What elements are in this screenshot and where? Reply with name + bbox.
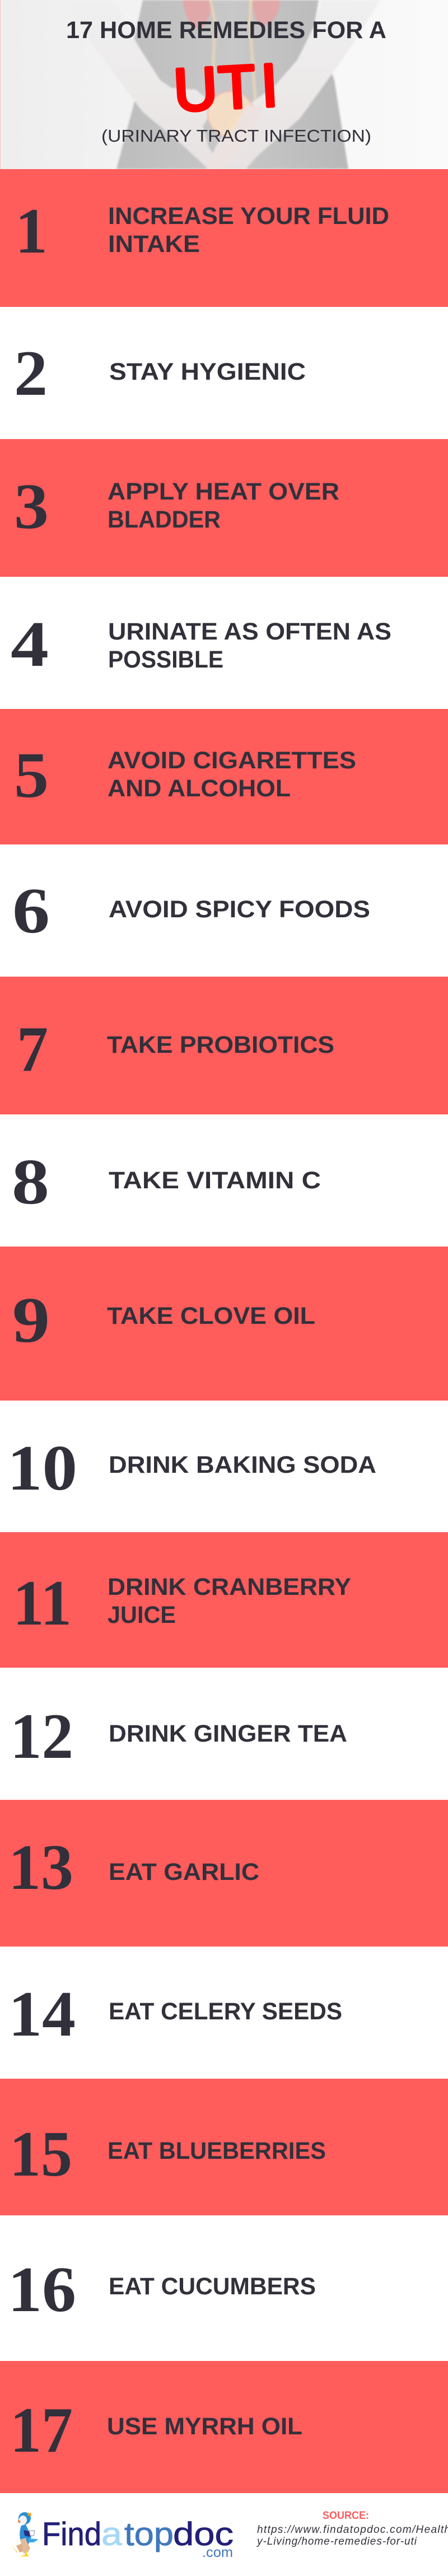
wordmark: Find	[42, 2516, 101, 2552]
remedy 13 panel: EAT GARLIC	[109, 1859, 259, 1886]
remedy 2 panel: 2	[14, 338, 48, 409]
wordmark: a	[101, 2516, 123, 2552]
remedy 1 panel: INTAKE	[108, 231, 200, 258]
remedy 4 panel	[0, 577, 448, 709]
remedy 3 panel	[0, 439, 448, 577]
remedy 12 panel: DRINK GINGER TEA	[109, 1720, 347, 1747]
remedy 3 panel: APPLY HEAT OVER	[108, 478, 339, 505]
remedy 11 panel: DRINK CRANBERRY	[108, 1574, 351, 1600]
remedy 16 panel: 16	[8, 2254, 76, 2326]
remedy 7 panel: TAKE PROBIOTICS	[107, 1032, 334, 1058]
remedy 17 panel: USE MYRRH OIL	[107, 2413, 302, 2440]
title line: 17 HOME REMEDIES FOR A	[66, 17, 386, 44]
remedy 2 panel	[0, 307, 448, 439]
source url: https://www.findatopdoc.com/Health	[257, 2524, 448, 2536]
footer logo	[11, 2512, 234, 2560]
remedy 1 panel: INCREASE YOUR FLUID	[108, 203, 389, 230]
remedy 4 panel: 4	[11, 609, 49, 680]
remedy 5 panel: 5	[14, 740, 49, 811]
remedy 12 panel	[0, 1668, 448, 1800]
remedy 9 panel: 9	[12, 1285, 50, 1356]
remedy 17 panel	[0, 2361, 448, 2493]
icon: mascot bird	[11, 2512, 38, 2556]
source block	[256, 2510, 448, 2547]
remedy 16 panel: EAT CUCUMBERS	[109, 2273, 316, 2300]
remedy 3 panel: BLADDER	[108, 506, 221, 533]
remedy 11 panel	[0, 1532, 448, 1668]
remedy 6 panel: AVOID SPICY FOODS	[109, 896, 370, 923]
remedy 6 panel: 6	[12, 875, 50, 947]
remedy 14 panel: 14	[8, 1978, 76, 2050]
remedy 9 panel: TAKE CLOVE OIL	[107, 1303, 315, 1329]
wordmark	[42, 2516, 234, 2552]
panel: header	[0, 0, 386, 169]
remedy 11 panel: 11	[13, 1567, 72, 1639]
remedy 1 panel: 1	[15, 195, 48, 267]
UTI heading: UTI	[172, 51, 279, 124]
remedy 4 panel: URINATE AS OFTEN AS	[108, 618, 391, 645]
.com: .com	[202, 2545, 233, 2560]
remedy 8 panel: 8	[12, 1146, 49, 1218]
remedy 8 panel	[0, 1114, 448, 1247]
remedy 2 panel: STAY HYGIENIC	[109, 358, 306, 385]
remedy 7 panel: 7	[17, 1014, 48, 1085]
remedy 9 panel	[0, 1247, 448, 1401]
remedy 10 panel: 10	[7, 1432, 77, 1504]
remedy 12 panel: 12	[10, 1701, 73, 1772]
source url: y-Living/home-remedies-for-uti	[256, 2536, 417, 2547]
header photo: torso with urinary tract	[0, 0, 381, 169]
remedy 7 panel	[0, 977, 448, 1114]
source label: SOURCE:	[323, 2510, 369, 2522]
remedy 5 panel: AVOID CIGARETTES	[108, 747, 356, 774]
wordmark: doc	[173, 2516, 234, 2552]
remedy 15 panel	[0, 2079, 448, 2215]
remedy 13 panel: 13	[8, 1832, 73, 1903]
remedy 16 panel	[0, 2215, 448, 2361]
remedy 14 panel: EAT CELERY SEEDS	[109, 1998, 342, 2025]
remedy 11 panel: JUICE	[108, 1602, 176, 1628]
remedy 5 panel: AND ALCOHOL	[108, 775, 291, 802]
remedy 10 panel: DRINK BAKING SODA	[109, 1452, 376, 1478]
remedy 4 panel: POSSIBLE	[108, 646, 223, 673]
remedy 3 panel: 3	[14, 471, 49, 543]
remedy 6 panel	[0, 844, 448, 977]
remedy 14 panel	[0, 1947, 448, 2079]
wordmark: top	[124, 2516, 174, 2552]
remedy 15 panel: EAT BLUEBERRIES	[108, 2138, 326, 2164]
remedy 17 panel: 17	[10, 2395, 73, 2466]
subtitle: (URINARY TRACT INFECTION)	[101, 126, 371, 146]
remedy 13 panel	[0, 1800, 448, 1947]
remedy 15 panel: 15	[10, 2118, 72, 2190]
remedy 10 panel	[0, 1401, 448, 1532]
remedy 1 panel	[0, 169, 448, 307]
remedy 8 panel: TAKE VITAMIN C	[109, 1167, 321, 1194]
remedy 5 panel	[0, 709, 448, 844]
